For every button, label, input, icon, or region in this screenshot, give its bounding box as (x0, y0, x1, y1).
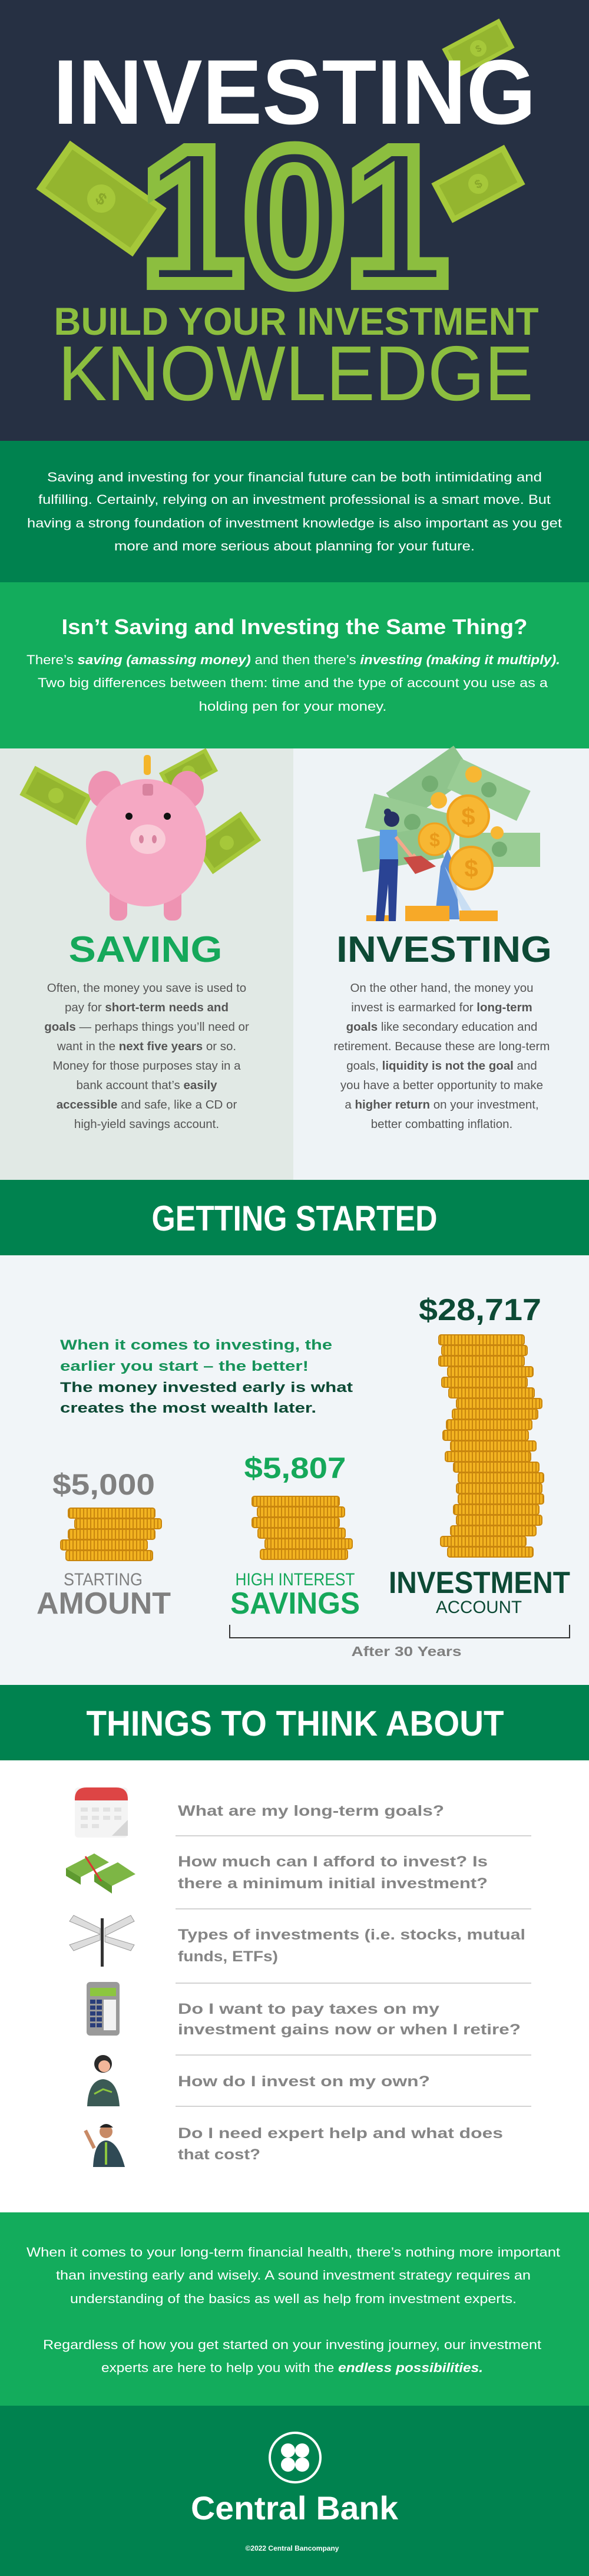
callout: invest early: When it comes to investing, the (60, 1337, 332, 1353)
callout: invest early: earlier you start – the better! (60, 1358, 309, 1374)
title: 101: 101 (141, 107, 448, 325)
label: investment account: INVESTMENT (389, 1566, 570, 1600)
panel: saving (0, 748, 293, 1180)
footer (0, 2406, 589, 2576)
question 3 (178, 1927, 525, 1965)
text: investing description: On the other hand, the money you (350, 981, 534, 995)
closing text: experts are here to help you with the endless possibilities. (101, 2360, 483, 2375)
label: investment account: ACCOUNT (436, 1598, 522, 1617)
coin stack large (439, 1335, 544, 1557)
icon: piggy bank (19, 748, 261, 921)
heading: GETTING STARTED: GETTING STARTED (152, 1199, 437, 1238)
icon: money tree with woman: $ (464, 855, 478, 882)
text: saving description: goals — perhaps things you’ll need or (44, 1020, 249, 1034)
label: starting amount: STARTING (64, 1570, 143, 1589)
intro text: having a strong foundation of investment knowledge is also important as you get (27, 516, 562, 530)
closing text (27, 2245, 560, 2375)
closing text: understanding of the basics as well as help from investment experts. (70, 2291, 517, 2306)
text: saving description (44, 981, 249, 1131)
intro text: more and more serious about planning for your future. (114, 539, 475, 553)
copyright: ©2022 Central Bancompany (246, 2544, 339, 2552)
closing band (0, 2212, 589, 2406)
coin stack medium (252, 1496, 352, 1559)
text: saving description: bank account that’s easily (77, 1078, 217, 1092)
heading: same thing: Isn’t Saving and Investing the Same Thing? (61, 615, 528, 639)
text: saving description: high-yield savings account. (74, 1117, 219, 1131)
icon: signpost (70, 1915, 134, 1967)
value: $28,717: $28,717 (419, 1293, 541, 1327)
label: starting amount (37, 1570, 171, 1621)
panel: investing (293, 746, 589, 1180)
question 6: Do I need expert help and what does (178, 2125, 503, 2142)
intro band (0, 441, 589, 582)
text: investing description: better combatting inflation. (371, 1117, 512, 1131)
value: $5,000: $5,000 (52, 1468, 155, 1501)
text: investing description: you have a better opportunity to make (340, 1078, 543, 1092)
label: investment account (389, 1566, 570, 1617)
icon: money tree with woman: $ (461, 803, 475, 830)
heading: INVESTING: INVESTING (336, 929, 552, 970)
icon: dollar bill top right: $ (474, 44, 484, 55)
icon: dollar bill left: $ (92, 189, 110, 209)
panel: getting started chart (0, 1255, 589, 1685)
callout: invest early: creates the most wealth later. (60, 1400, 316, 1416)
header background (0, 0, 589, 441)
text: difference (27, 652, 560, 714)
text: investing description: goals like secondary education and (346, 1020, 537, 1034)
heading: things to think about: THINGS TO THINK ABOUT (86, 1704, 504, 1743)
label: high interest savings: SAVINGS (230, 1587, 360, 1621)
text: difference: holding pen for your money. (199, 699, 386, 714)
question 5: How do I invest on my own? (178, 2073, 430, 2090)
value: $5,807: $5,807 (244, 1452, 346, 1485)
text: saving description: pay for short-term needs and (65, 1001, 229, 1014)
question 4: Do I want to pay taxes on my (178, 2001, 439, 2017)
closing text: When it comes to your long-term financial health, there’s nothing more important (27, 2245, 560, 2260)
intro text: fulfilling. Certainly, relying on an investment professional is a smart move. But (38, 492, 551, 507)
text: investing description: invest is earmarked for long-term (351, 1001, 532, 1014)
text: investing description: goals, liquidity is not the goal and (346, 1059, 537, 1073)
title: INVESTING: INVESTING (53, 41, 536, 144)
text: saving description: Money for those purposes stay in a (52, 1059, 241, 1073)
section: saving vs investing intro (0, 582, 589, 748)
icon: money stacks (66, 1853, 135, 1894)
text: saving description: want in the next five years or so. (57, 1040, 236, 1053)
question 2: How much can I afford to invest? Is (178, 1853, 488, 1870)
text: saving description: Often, the money you save is used to (47, 981, 246, 995)
question 3: funds, ETFs) (178, 1948, 278, 1965)
icon: man waving (85, 2124, 125, 2167)
label: starting amount: AMOUNT (37, 1587, 171, 1621)
icon: calculator (87, 1982, 120, 2036)
bracket: after 30 years: After 30 Years (351, 1644, 462, 1659)
subtitle: build your investment: BUILD YOUR INVESTMENT (54, 299, 538, 343)
text: difference: There’s saving (amassing money) and then there’s investing (making it multiply). (27, 652, 560, 667)
question 4 (178, 2001, 521, 2038)
question 2: there a minimum initial investment? (178, 1875, 488, 1892)
closing text: Regardless of how you get started on your investing journey, our investment (43, 2337, 541, 2352)
text: saving description: accessible and safe, like a CD or (57, 1098, 237, 1111)
bracket: after 30 years (230, 1625, 570, 1659)
logo text: Central Bank: Central Bank (191, 2489, 399, 2526)
text: investing description: a higher return on your investment, (345, 1098, 539, 1111)
icon: dollar bill right: $ (472, 177, 485, 192)
band: getting started (0, 1180, 589, 1255)
icon: calendar (75, 1787, 128, 1838)
heading: SAVING: SAVING (68, 929, 223, 970)
coin stack small (61, 1508, 161, 1561)
text: investing description (334, 981, 550, 1131)
question 1: What are my long-term goals? (178, 1803, 444, 1819)
question 2 (178, 1853, 488, 1892)
icon: dollar bill right (431, 145, 525, 223)
callout: invest early (60, 1337, 353, 1416)
intro text: Saving and investing for your financial future can be both intimidating and (47, 470, 542, 484)
logo: clover (270, 2433, 320, 2482)
question 6: that cost? (178, 2146, 260, 2163)
question 3: Types of investments (i.e. stocks, mutual (178, 1927, 525, 1943)
subtitle: knowledge: KNOWLEDGE (58, 330, 534, 417)
label: high interest savings: HIGH INTEREST (236, 1570, 355, 1589)
intro text (27, 470, 562, 553)
question 4: investment gains now or when I retire? (178, 2021, 521, 2038)
question 6 (178, 2125, 503, 2163)
panel: questions list (0, 1760, 589, 2212)
icon: money tree with woman: $ (429, 829, 440, 850)
band: things to think about (0, 1685, 589, 1760)
icon: dollar bill left (36, 141, 167, 256)
icon: woman with chart (87, 2055, 120, 2106)
callout: invest early: The money invested early is what (60, 1380, 353, 1396)
closing text: than investing early and wisely. A sound investment strategy requires an (56, 2268, 531, 2283)
icon: dollar bill top right (442, 18, 515, 78)
text: difference: Two big differences between them: time and the type of account you use as a (38, 675, 548, 690)
icon: money tree with woman (357, 746, 540, 921)
text: investing description: retirement. Because these are long-term (334, 1040, 550, 1053)
label: high interest savings (230, 1570, 360, 1621)
